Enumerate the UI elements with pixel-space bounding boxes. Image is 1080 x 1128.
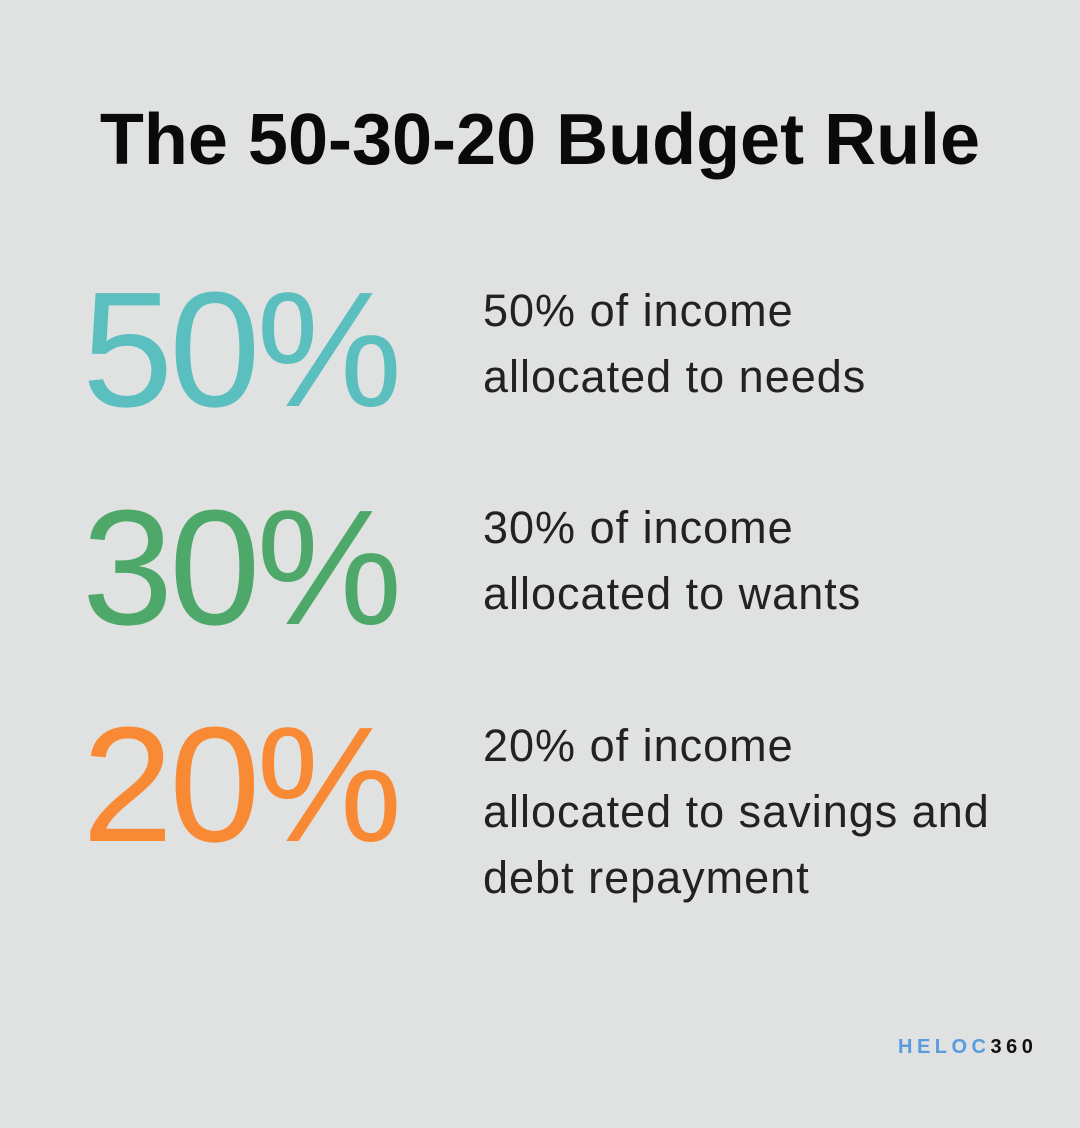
text: savings: debt repayment: [483, 852, 810, 903]
text: savings: [483, 720, 990, 903]
stat: 30%: 30%: [82, 476, 398, 659]
title: The 50-30-20 Budget Rule: [100, 100, 980, 180]
text: savings: allocated to savings and: [483, 786, 990, 837]
text: needs: 50% of income: [483, 285, 794, 336]
text: needs: allocated to needs: [483, 351, 866, 402]
text: wants: [483, 502, 861, 619]
stat: 20%: 20%: [82, 693, 398, 876]
text: needs: [483, 285, 866, 402]
text: wants: allocated to wants: [483, 568, 861, 619]
stat: 50%: 50%: [82, 258, 398, 441]
text: savings: 20% of income: [483, 720, 794, 771]
logo: HELOC360: [898, 1036, 1037, 1058]
text: wants: 30% of income: [483, 502, 794, 553]
